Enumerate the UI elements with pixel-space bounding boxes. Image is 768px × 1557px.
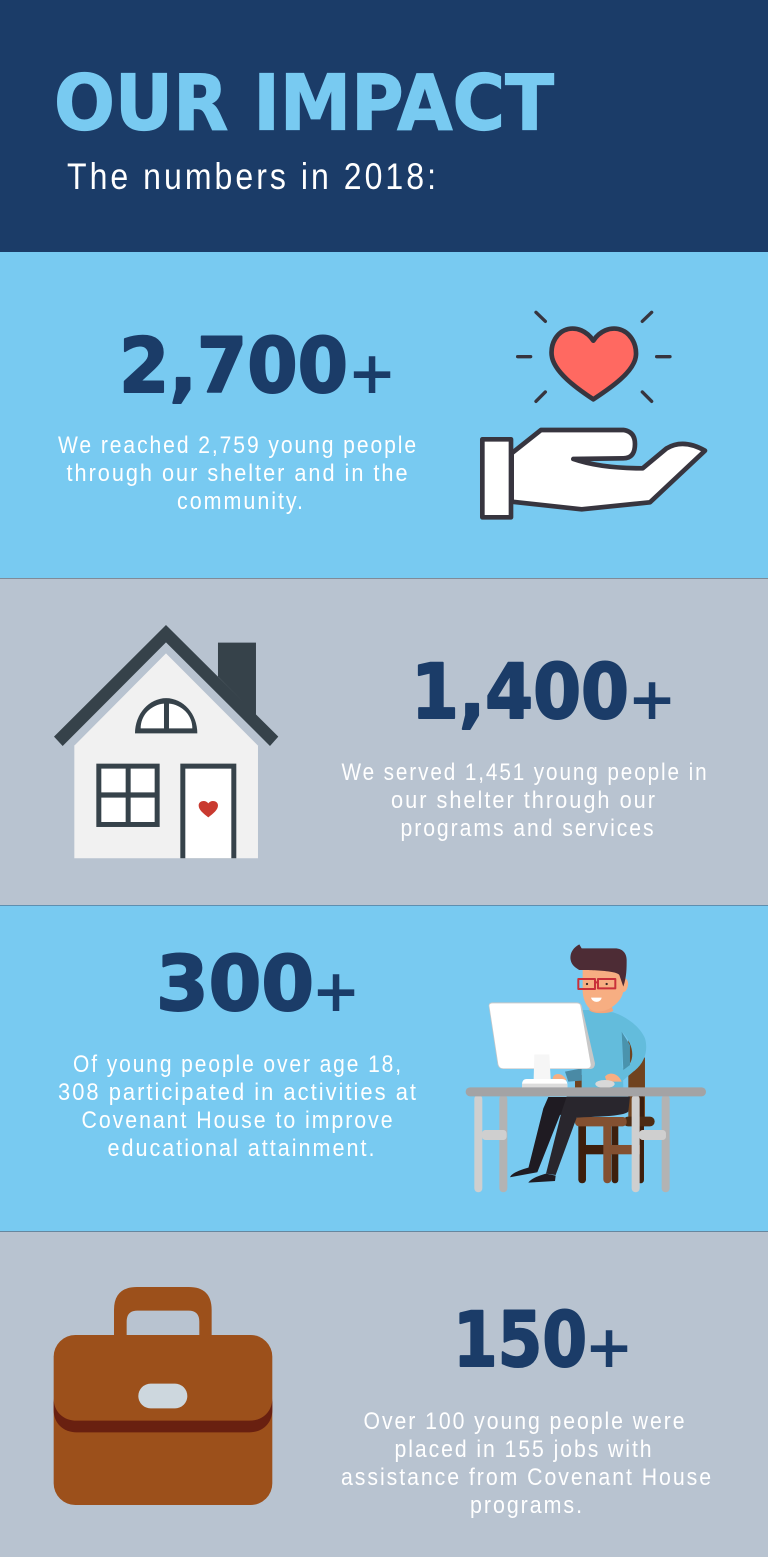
text: jobs description: programs.	[470, 1492, 584, 1519]
text: education description: 308 participated in activities at	[58, 1079, 418, 1106]
stat: 150+: +	[586, 1315, 632, 1379]
text: education description: educational attainment.	[108, 1135, 376, 1162]
text: shelter description: programs and services	[400, 815, 656, 842]
text: shelter description	[342, 759, 708, 842]
text: shelter description: our shelter through our	[391, 787, 657, 814]
panel: header	[0, 0, 768, 252]
text: education description	[58, 1051, 418, 1162]
icon: hand holding heart	[482, 312, 705, 517]
text: jobs description	[341, 1408, 713, 1519]
stat: 1,400+: +	[629, 667, 675, 731]
panel: shelter	[0, 578, 768, 905]
panel: reach	[0, 252, 768, 578]
text: reach description: community.	[177, 488, 305, 515]
text: education description: Covenant House to improve	[82, 1107, 394, 1134]
stat: 2,700+: +	[349, 341, 395, 405]
text: shelter description: We served 1,451 young people in	[342, 759, 708, 786]
icon: person at desk	[466, 944, 706, 1192]
text: reach description	[58, 432, 418, 515]
subtitle: The numbers in 2018:	[67, 156, 439, 197]
icon: briefcase	[54, 1287, 272, 1505]
text: jobs description: Over 100 young people were	[364, 1408, 686, 1435]
stat: 300+: 300	[156, 939, 314, 1028]
title: OUR IMPACT	[54, 60, 554, 148]
text: jobs description: placed in 155 jobs with	[394, 1436, 654, 1463]
icon: house	[54, 625, 278, 858]
stat: 150+: 150	[453, 1295, 587, 1384]
stat: 2,700+: 2,700	[119, 321, 348, 410]
text: reach description: through our shelter and in the	[66, 460, 410, 487]
text: education description: Of young people over age 18,	[73, 1051, 403, 1078]
panel: jobs	[0, 1231, 768, 1557]
stat: 1,400+: 1,400	[411, 647, 629, 736]
text: reach description: We reached 2,759 young people	[58, 432, 418, 459]
panel: education	[0, 905, 768, 1231]
stat: 300+: +	[313, 959, 359, 1023]
text: jobs description: assistance from Covenant House	[341, 1464, 713, 1491]
